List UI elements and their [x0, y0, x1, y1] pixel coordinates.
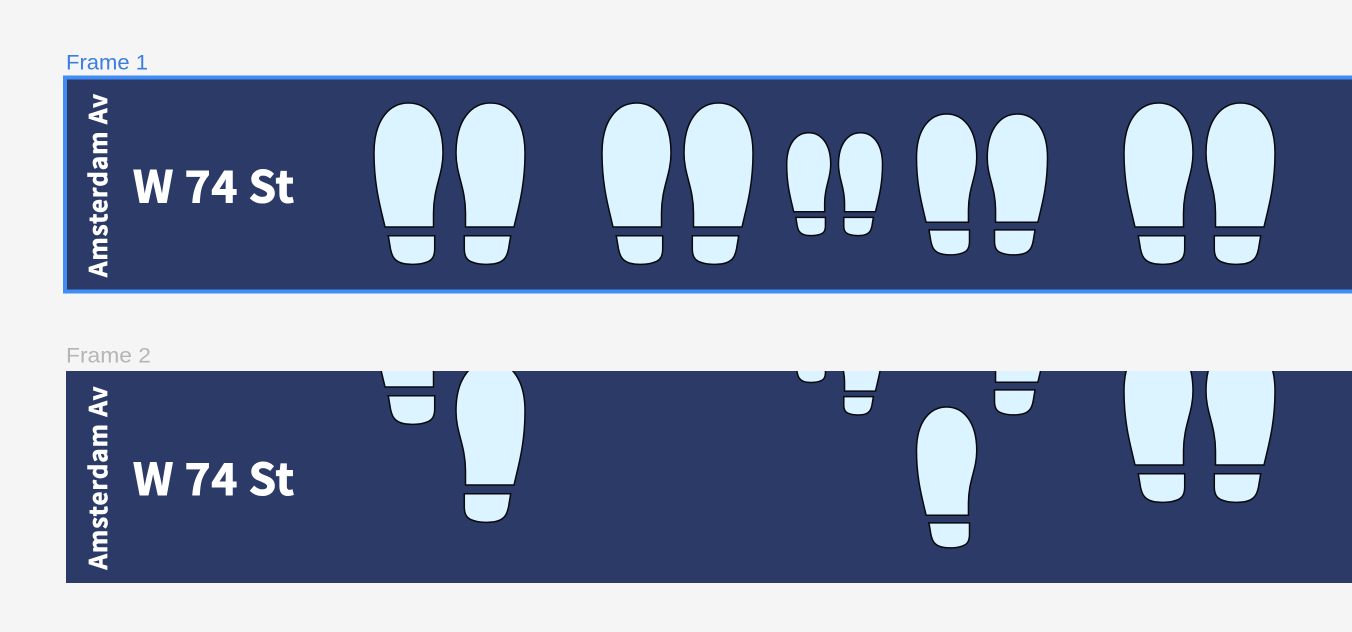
footprint pair 1 left	[374, 103, 443, 264]
footprint pair 5 left	[1124, 103, 1193, 264]
footprint pair 2 left	[602, 103, 671, 264]
footprint pair 5 left	[1123, 371, 1194, 504]
footprint pair 1 right	[456, 103, 525, 264]
avenue label: Amsterdam Av	[79, 94, 114, 278]
footprint pair 4 right	[987, 114, 1048, 255]
footprints clipped to frame	[380, 371, 1276, 549]
footprint pair 4 left	[916, 114, 977, 255]
footprint pair 5 right	[1205, 371, 1276, 504]
panel: frame 1	[65, 78, 1352, 292]
footprint pair 3 right	[838, 133, 882, 236]
footprint pair 3 right	[842, 371, 881, 416]
avenue label: Amsterdam Av	[79, 386, 114, 570]
footprint pair 1 right	[456, 361, 525, 522]
footprint pair 5 right	[1206, 103, 1275, 264]
footprint pair 3 left	[796, 371, 826, 384]
panel: frame 2	[66, 371, 1352, 583]
label: Frame 2: Frame 2	[66, 344, 151, 368]
footprint pair 1 left	[380, 371, 436, 426]
street label: W 74 St	[133, 444, 294, 508]
label: Frame 1: Frame 1	[66, 50, 148, 74]
footprint pair 4 right	[994, 371, 1042, 416]
footprint pair 4 left	[916, 407, 977, 548]
footprint pair 3 left	[787, 133, 831, 236]
street label: W 74 St	[133, 152, 294, 216]
footprint pair 2 right	[684, 103, 753, 264]
